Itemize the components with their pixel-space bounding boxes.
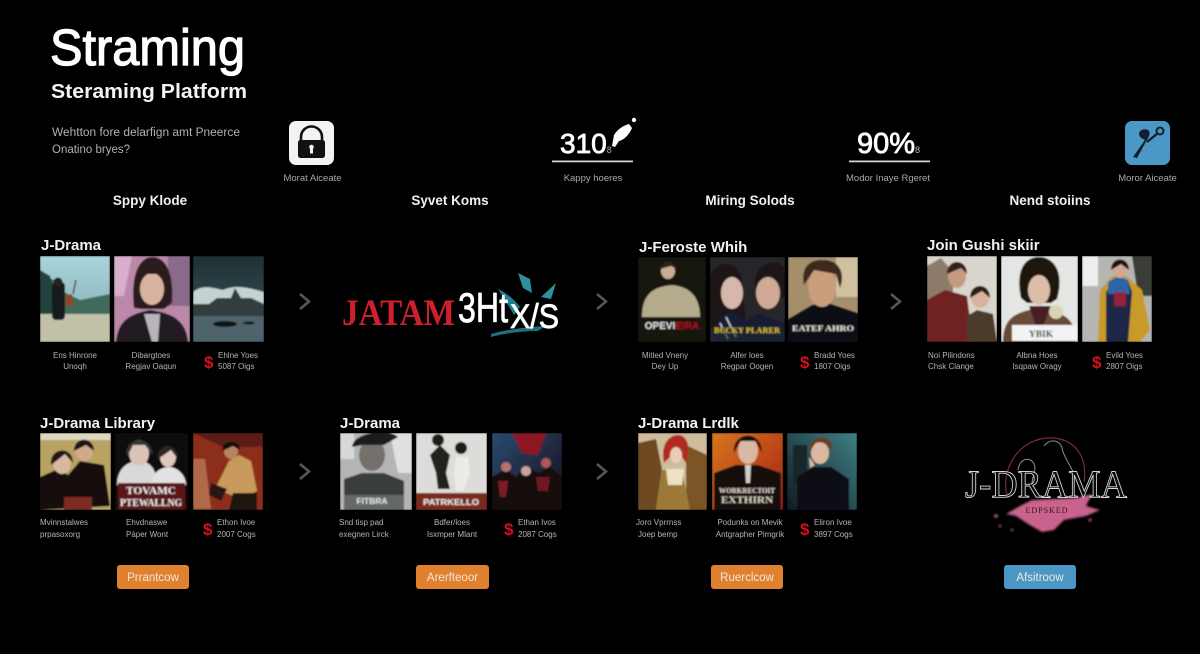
poster: red room xyxy=(193,433,263,510)
panel heading: J-Drama Lrdlk xyxy=(638,415,740,432)
tagline: EDPSKED xyxy=(1025,506,1069,515)
poster: two dancers: PATRKELLO xyxy=(423,497,479,507)
title: Straming xyxy=(50,19,245,76)
logo: J-Drama xyxy=(965,438,1127,532)
column heading 4: Nend stoiins xyxy=(1009,193,1091,208)
button xyxy=(416,565,489,589)
intro text: Wehtton fore delarfign amt Pneerce xyxy=(52,127,240,139)
captions: Antgrapher Pimgrik xyxy=(716,530,785,539)
button: Prrantcow xyxy=(127,572,180,584)
captions: Regjav Oaqun xyxy=(125,362,177,371)
icon: lock xyxy=(289,121,334,165)
poster: lakeside figure xyxy=(40,256,110,342)
captions: Bdfer/loes xyxy=(434,518,470,527)
red wordmark: JATAM xyxy=(342,293,455,334)
captions: Pàper Wont xyxy=(126,530,169,539)
captions: prpasoxorg xyxy=(40,530,80,539)
poster: red-haired illustration xyxy=(638,433,707,510)
panel: J-Feroste Whih xyxy=(638,239,858,372)
white wordmark end: X/S xyxy=(510,298,559,336)
captions: Noi Pilindons xyxy=(928,351,975,360)
captions: Snd tisp pad xyxy=(339,518,383,527)
stat: blue tool xyxy=(1118,121,1177,184)
captions: $ xyxy=(203,520,213,539)
icon: microphone xyxy=(612,118,636,147)
captions: Ethan Ivos xyxy=(518,518,556,527)
button: Ruerclcow xyxy=(720,572,775,584)
stat: 90% xyxy=(846,128,930,184)
captions: Ehlne Yoes xyxy=(218,351,258,360)
button: Afsitroow xyxy=(1016,572,1064,584)
captions: exegnen Lirck xyxy=(339,530,390,539)
captions: Dey Up xyxy=(652,362,679,371)
stat value: 3108 xyxy=(560,128,612,159)
poster: night portrait xyxy=(787,433,857,510)
captions: Joro Vprrnss xyxy=(636,518,681,527)
poster: girl with badge xyxy=(1001,256,1078,342)
poster: grey portrait xyxy=(340,433,412,510)
column heading 2: Syvet Koms xyxy=(411,193,489,208)
arrow xyxy=(597,294,606,309)
button xyxy=(1004,565,1076,589)
captions: Alfer loes xyxy=(730,351,764,360)
poster: young man xyxy=(788,257,858,342)
captions: Bradd Yoes xyxy=(814,351,855,360)
poster: fire portrait: EXTHIRN xyxy=(721,495,774,505)
stat: 310 xyxy=(552,118,636,184)
captions: $ xyxy=(504,520,514,539)
captions: Unoqh xyxy=(63,362,87,371)
arrow xyxy=(891,294,900,309)
poster: man and girl xyxy=(927,256,997,342)
captions: Podunks on Mevik xyxy=(717,518,784,527)
captions: Mitled Vneny xyxy=(642,351,688,360)
captions: $ xyxy=(1092,353,1102,372)
captions xyxy=(636,518,853,539)
panel heading: Join Gushi skiir xyxy=(927,237,1040,254)
captions: Regpar Oogen xyxy=(721,362,773,371)
outlined wordmark: J-DRAMA xyxy=(965,463,1127,506)
captions: Mvinnstalwes xyxy=(40,518,88,527)
arrow xyxy=(300,294,309,309)
panel: J-Drama Library xyxy=(40,415,263,589)
captions: Evild Yoes xyxy=(1106,351,1143,360)
stat label: Modor Inaye Rgeret xyxy=(846,173,930,184)
captions: Chsk Clange xyxy=(928,362,974,371)
poster: colourful coat xyxy=(1082,256,1152,342)
captions: Joep bemp xyxy=(638,530,678,539)
captions xyxy=(642,351,855,372)
panel heading: J-Feroste Whih xyxy=(639,239,747,256)
captions: 2807 Oigs xyxy=(1106,362,1142,371)
poster: fire portrait xyxy=(712,433,783,510)
panel heading: J-Drama xyxy=(340,415,401,432)
button xyxy=(117,565,189,589)
poster: harbour xyxy=(193,256,264,342)
captions: 1807 Oigs xyxy=(814,362,850,371)
poster: two women, dark: TOVAMC xyxy=(126,486,176,497)
column heading 3: Miring Solods xyxy=(705,193,795,208)
poster: two faces xyxy=(710,257,785,342)
captions: Ens Hinrone xyxy=(53,351,98,360)
arrow xyxy=(597,464,606,479)
poster: grey portrait: FITBRA xyxy=(356,496,388,506)
captions xyxy=(928,351,1143,372)
poster: dark figure xyxy=(638,257,706,342)
poster: band on dark xyxy=(492,433,562,510)
panel: J-Drama row 2 xyxy=(339,415,562,589)
captions: Isqpaw Oragy xyxy=(1012,362,1062,371)
stat label: Moror Aiceate xyxy=(1118,173,1177,184)
captions: 5087 Oigs xyxy=(218,362,254,371)
poster: portrait on pink xyxy=(114,256,190,342)
line-art emblem xyxy=(1006,438,1085,498)
captions: 2007 Cogs xyxy=(217,530,256,539)
stat value: 90%8 xyxy=(857,128,920,160)
panel heading: J-Drama xyxy=(41,237,102,254)
captions: Eliron Ivoe xyxy=(814,518,852,527)
panel: J-Drama row 1 xyxy=(40,237,264,372)
captions: $ xyxy=(800,353,810,372)
white wordmark: 3Ht xyxy=(458,284,508,331)
captions: Dibargtoes xyxy=(132,351,170,360)
captions: $ xyxy=(800,520,810,539)
captions: Ehvdnaswe xyxy=(126,518,168,527)
brush accents xyxy=(491,273,556,337)
poster: dark figure: OPEVIEIRA xyxy=(645,321,699,332)
stat: lock xyxy=(283,121,342,184)
panel heading: J-Drama Library xyxy=(40,415,156,432)
captions xyxy=(339,518,557,539)
captions: $ xyxy=(204,353,214,372)
arrow xyxy=(300,464,309,479)
logo: JATAM xyxy=(342,273,559,337)
captions xyxy=(40,518,256,539)
poster: group on tan xyxy=(40,433,111,510)
stat label: Morat Aiceate xyxy=(283,173,342,184)
icon: blue tool xyxy=(1125,121,1170,165)
button: Arerfteoor xyxy=(427,572,478,584)
poster: two women, dark xyxy=(115,433,188,510)
captions: Albna Hoes xyxy=(1016,351,1058,360)
poster: two faces: BUCKY PLARER xyxy=(714,326,780,335)
poster: two dancers xyxy=(416,433,487,510)
panel: Join Gushi skiir xyxy=(927,237,1152,372)
captions: Isxmper Mlant xyxy=(427,530,478,539)
captions: 3897 Cogs xyxy=(814,530,853,539)
intro text: Onatino bryes? xyxy=(52,144,130,156)
column heading 1: Sppy Klode xyxy=(113,193,188,208)
captions xyxy=(53,351,258,372)
pink splash xyxy=(994,494,1100,532)
poster: young man: EATEF AHRO xyxy=(792,323,854,333)
subtitle: Steraming Platform xyxy=(51,81,247,103)
button xyxy=(711,565,783,589)
poster: fire portrait: WORKRECTOIT xyxy=(719,487,775,495)
captions: 2087 Cogs xyxy=(518,530,557,539)
stat label: Kappy hoeres xyxy=(564,173,623,184)
poster: girl with badge: YBIK xyxy=(1029,330,1054,340)
panel: J-Drama Lrdlk xyxy=(636,415,857,589)
captions: Ethon Ivoe xyxy=(217,518,256,527)
